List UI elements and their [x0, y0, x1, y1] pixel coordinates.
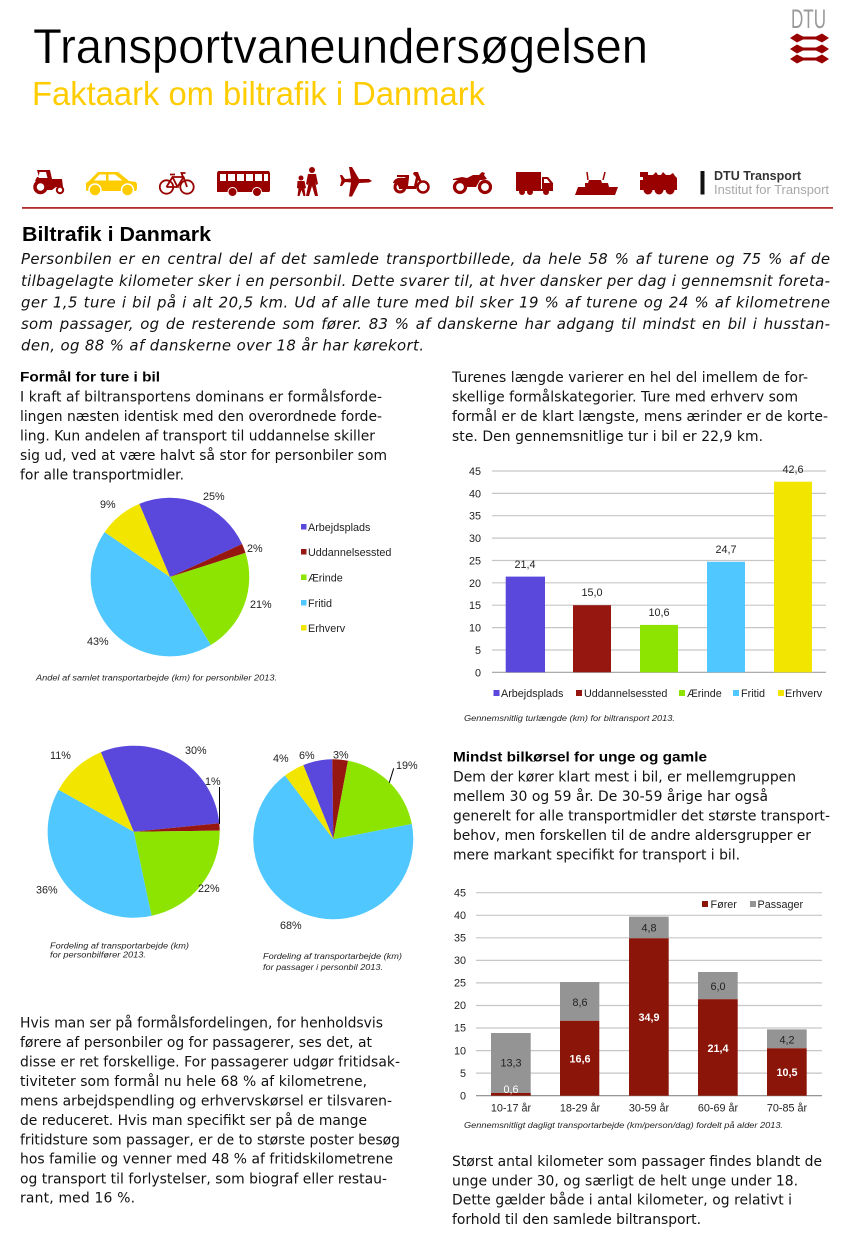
bar chart: turlængde: 10,6	[648, 607, 670, 619]
stacked bar chart: alder: 30	[454, 955, 466, 967]
text block: passagerer: Dette gælder både i antal kilometer, og relativt i	[452, 1192, 792, 1209]
text block: turlængde: Turenes længde varierer en hel del imellem de for-	[451, 370, 808, 386]
caption: fører pie: for personbilfører 2013.	[50, 950, 146, 960]
text block: formålsfordeling: førere af personbiler og for passagerer, ses det, at	[20, 1035, 373, 1051]
bar chart: turlængde: 20	[469, 578, 481, 590]
bar chart: turlængde: 42,6	[782, 464, 804, 476]
text block: turlængde: ste. Den gennemsnitlige tur i bil er 22,9 km.	[452, 429, 763, 445]
stacked bar chart: alder: 10	[454, 1045, 466, 1057]
bar chart: turlængde: 40	[469, 488, 481, 500]
DTU logo	[790, 4, 829, 64]
caption: passager pie: Fordeling af transportarbejde (km)	[263, 951, 402, 961]
bar chart: turlængde: 0	[475, 667, 481, 679]
stacked bar chart: alder: 4,8	[641, 923, 657, 935]
title: Transportvaneundersøgelsen	[33, 20, 648, 74]
text block: aldersgrupper: mere markant specifikt for transport i bil.	[453, 847, 740, 863]
intro text: som passager, og de resterende som fører. 83 % af danskerne har adgang til mindst en bil i husstan-	[21, 315, 830, 333]
stacked bar chart: alder: 34,9	[638, 1012, 660, 1024]
icon: bus	[217, 171, 270, 196]
text block: aldersgrupper: Dem der kører klart mest i bil, er mellemgruppen	[453, 770, 796, 786]
caption: alder chart: Gennemsnitligt dagligt transportarbejde (km/person/dag) fordelt på alder 2013.	[464, 1120, 783, 1130]
text block: aldersgrupper: mellem 30 og 59 år. De 30-59 årige har også	[453, 788, 768, 805]
pie legend	[301, 522, 391, 635]
stacked bar chart: alder: 45	[454, 888, 466, 900]
text block: turlængde: formål er de klart længste, mens ærinder er de korte-	[452, 408, 828, 425]
caption: fører pie	[50, 940, 189, 960]
intro text: tilbagelagte kilometer sker i en personbil. Dette svarer til, at hver dansker per dag i gennemsnit foreta-	[21, 272, 830, 290]
stacked bar chart: alder: 25	[454, 978, 466, 990]
pie chart: fører: 1%	[205, 776, 221, 788]
bar chart: turlængde: 5	[475, 645, 481, 657]
text block: formålsfordeling: rant, med 16 %.	[20, 1191, 135, 1207]
stacked chart legend	[702, 899, 804, 911]
stacked bar chart: alder: 35	[454, 932, 466, 944]
bar chart: turlængde: 24,7	[715, 544, 737, 556]
bar chart legend: Uddannelsessted	[584, 688, 667, 700]
pie chart: passager	[253, 749, 418, 932]
stacked bar chart: alder: 20	[454, 1000, 466, 1012]
bar chart: turlængde	[469, 464, 826, 679]
stacked bar chart: alder: 21,4	[707, 1043, 729, 1055]
intro text: den, og 88 % af danskerne over 18 år har kørekort.	[21, 336, 424, 354]
text block: formålsfordeling: de reduceret. Hvis man specifikt ser på de mange	[20, 1112, 367, 1129]
bar chart: turlængde: 10	[469, 623, 481, 635]
stacked bar chart: alder: 13,3	[500, 1058, 522, 1070]
stacked bar chart: alder: 5	[460, 1068, 466, 1080]
subtitle: Faktaark om biltrafik i Danmark	[32, 75, 485, 112]
stacked bar chart: alder: 4,2	[779, 1035, 795, 1047]
text block: formål: lingen næsten identisk med den overordnede forde-	[20, 409, 382, 425]
stacked bar chart: alder: 10-17 år	[491, 1103, 532, 1115]
text block: passagerer: forhold til den samlede biltransport.	[452, 1212, 701, 1228]
pie legend: Arbejdsplads	[308, 522, 371, 534]
bar chart: turlængde: 15,0	[581, 587, 603, 599]
caption: turlængde chart: Gennemsnitlig turlængde (km) for biltransport 2013.	[464, 713, 675, 723]
pie chart: passager: 4%	[273, 753, 289, 765]
bar chart: turlængde: 45	[469, 466, 481, 478]
icon: bicycle	[160, 173, 194, 194]
stacked bar chart: alder: 60-69 år	[698, 1103, 739, 1115]
icon: truck	[516, 172, 553, 195]
caption: passager pie	[263, 951, 402, 972]
pie chart: fører: 36%	[36, 884, 58, 896]
pie chart: passager: 19%	[396, 760, 418, 772]
pie chart: samlet: 43%	[87, 636, 109, 648]
DTU Transport label	[700, 169, 830, 197]
text block: turlængde: skellige formålskategorier. Ture med erhverv som	[452, 388, 798, 406]
pie legend: Ærinde	[308, 572, 343, 584]
pie chart: samlet: 25%	[203, 491, 225, 503]
icon: airplane	[340, 167, 372, 196]
stacked bar chart: alder: 40	[454, 910, 466, 922]
pie chart: passager: 6%	[299, 750, 315, 762]
text block: formål: sig ud, ved at være halvt så stor for personbiler som	[20, 447, 387, 464]
icon: ship	[575, 172, 618, 195]
pie chart: fører: 11%	[50, 750, 71, 762]
text block: formålsfordeling: fritidsture som passager, er de to største poster besøg	[20, 1132, 400, 1148]
stacked bar chart: alder	[454, 888, 822, 1115]
intro text: Personbilen er en central del af det samlede transportbillede, da hele 58 % af turene og 75 % af de	[21, 250, 830, 268]
text block: formål	[20, 389, 387, 483]
bar chart: turlængde: 21,4	[514, 559, 536, 571]
heading: Biltrafik i Danmark: Biltrafik i Danmark	[22, 223, 212, 246]
text block: formålsfordeling: disse er ret forskellige. For passagerer udgør fritidsak-	[20, 1055, 400, 1071]
caption: passager pie: for passager i personbil 2013.	[263, 962, 383, 972]
intro text: ger 1,5 ture i bil på i alt 20,5 km. Ud af alle ture med bil sker 19 % af turene og 24 % af kilometrene	[21, 294, 830, 312]
stacked bar chart: alder: 10,5	[776, 1067, 798, 1079]
pie chart: passager: 3%	[333, 749, 349, 761]
stacked bar chart: alder: 0,6	[503, 1084, 519, 1096]
text block: turlængde	[451, 370, 828, 445]
text block: aldersgrupper	[453, 770, 830, 863]
bar chart legend	[494, 688, 823, 700]
icon row	[35, 167, 677, 196]
stacked bar chart: alder: 18-29 år	[560, 1103, 601, 1115]
stacked bar chart: alder: 8,6	[572, 997, 588, 1009]
stacked chart legend: Passager	[758, 899, 804, 911]
pie chart: fører: 30%	[185, 745, 207, 757]
text block: aldersgrupper: generelt for alle transportmidler det største transport-	[453, 809, 830, 825]
text block: formålsfordeling: tiviteter som formål nu hele 68 % af kilometrene,	[20, 1073, 367, 1090]
stacked bar chart: alder: 6,0	[710, 981, 726, 993]
icon: pedestrians	[297, 167, 318, 196]
pie legend: Fritid	[308, 598, 332, 610]
bar chart: turlængde: 30	[469, 533, 481, 545]
pie chart: passager: 68%	[280, 920, 302, 932]
DTU Transport label: Institut for Transport	[714, 183, 830, 197]
text block: formålsfordeling: mens arbejdspendling og erhvervskørsel er tilsvaren-	[20, 1094, 392, 1110]
text block: formål: I kraft af biltransportens dominans er formålsforde-	[20, 389, 382, 406]
pie chart: samlet: 2%	[247, 543, 263, 555]
pie chart: fører	[36, 745, 221, 918]
bar chart: turlængde: 15	[469, 600, 481, 612]
icon: moped	[393, 172, 428, 192]
icon: motorcycle	[453, 172, 490, 192]
bar chart legend: Fritid	[741, 688, 765, 700]
stacked bar chart: alder: 15	[454, 1023, 466, 1035]
stacked chart legend: Fører	[710, 899, 737, 911]
stacked bar chart: alder: 30-59 år	[629, 1103, 670, 1115]
stacked bar chart: alder: 70-85 år	[767, 1103, 808, 1115]
text block: formålsfordeling: hos familie og venner med 48 % af fritidskilometrene	[20, 1152, 393, 1168]
heading: Formål for ture i bil: Formål for ture i bil	[20, 369, 160, 385]
text block: formålsfordeling: Hvis man ser på formålsfordelingen, for henholdsvis	[20, 1015, 383, 1032]
icon: tractor	[35, 170, 63, 193]
text block: passagerer	[452, 1154, 822, 1228]
pie chart: samlet	[87, 491, 272, 656]
stacked bar chart: alder: 16,6	[569, 1054, 591, 1066]
text block: formålsfordeling: og transport til forlystelser, som biograf eller restau-	[20, 1171, 387, 1187]
pie chart: fører: 22%	[198, 883, 220, 895]
DTU logo: DTU	[791, 4, 826, 34]
bar chart legend: Ærinde	[687, 688, 722, 700]
caption: fører pie: Fordeling af transportarbejde (km)	[50, 940, 189, 950]
heading: Mindst bilkørsel: Mindst bilkørsel for unge og gamle	[453, 749, 707, 765]
intro text	[21, 250, 830, 354]
DTU Transport label: DTU Transport	[714, 169, 802, 183]
stacked bar chart: alder: 0	[460, 1090, 466, 1102]
pie chart: samlet: 21%	[250, 599, 272, 611]
bar chart: turlængde: 35	[469, 511, 481, 523]
pie legend: Uddannelsessted	[308, 547, 391, 559]
text block: aldersgrupper: behov, men forskellen til de andre aldersgrupper er	[453, 828, 811, 844]
bar chart legend: Arbejdsplads	[501, 688, 564, 700]
pie chart: samlet: 9%	[100, 499, 116, 511]
text block: formål: ling. Kun andelen af transport til uddannelse skiller	[20, 429, 375, 445]
text block: passagerer: Størst antal kilometer som passager findes blandt de	[452, 1154, 822, 1170]
text block: formål: for alle transportmidler.	[20, 467, 184, 483]
icon: train	[640, 172, 677, 194]
caption: samlet pie: Andel af samlet transportarbejde (km) for personbiler 2013.	[35, 673, 277, 683]
text block: formålsfordeling	[20, 1015, 400, 1207]
text block: passagerer: unge under 30, og særligt de helt unge under 18.	[452, 1173, 798, 1189]
bar chart: turlængde: 25	[469, 556, 481, 568]
bar chart legend: Erhverv	[785, 688, 823, 700]
icon: car	[86, 172, 137, 196]
pie legend: Erhverv	[308, 623, 346, 635]
